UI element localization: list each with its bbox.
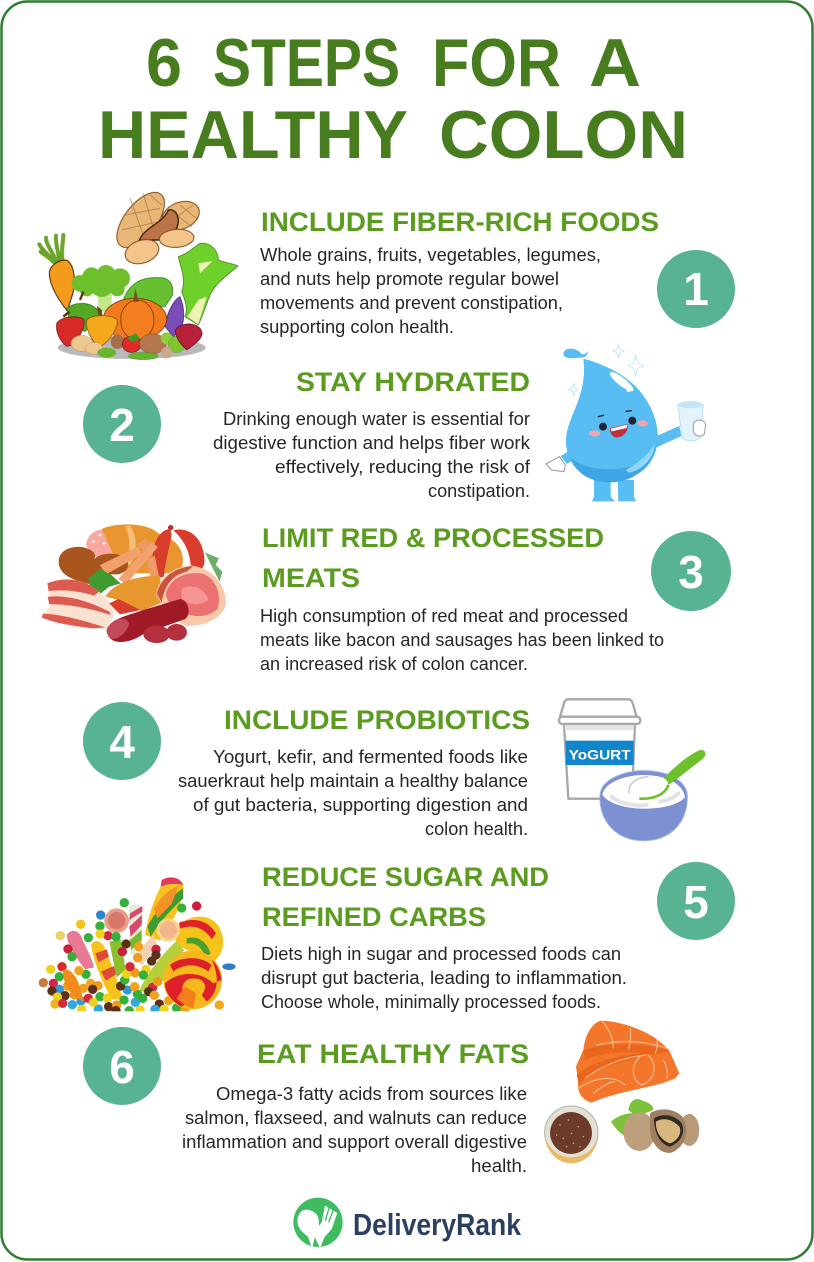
title: COLON — [439, 97, 688, 173]
title: STEPS — [213, 25, 400, 101]
number badge 6 — [83, 1027, 161, 1105]
title — [98, 25, 688, 173]
icon: candy and sweets — [37, 877, 237, 1021]
number badge 5 — [657, 862, 735, 940]
text: step 2: constipation. — [428, 481, 530, 501]
text: step 1 — [260, 245, 601, 337]
title: HEALTHY — [98, 97, 408, 173]
title: A — [589, 25, 641, 101]
text: step 5: disrupt gut bacteria, leading to inflammation. — [261, 968, 627, 988]
title: FOR — [432, 25, 561, 101]
logo: DeliveryRank — [293, 1198, 522, 1249]
text: step 4 — [178, 747, 528, 839]
text: step 2: Drinking enough water is essential for — [223, 409, 530, 429]
text: step 5: Choose whole, minimally processed foods. — [261, 992, 601, 1012]
icon: red and processed meats — [42, 524, 226, 643]
text: step 4: of gut bacteria, supporting digestion and — [193, 795, 528, 815]
text: step 3 — [260, 606, 664, 674]
icon: yogurt cup and bowl: YoGURT — [569, 746, 631, 762]
number badge 3 — [651, 531, 731, 611]
number badge 2 — [83, 385, 161, 463]
heading: step 1: INCLUDE FIBER-RICH FOODS — [261, 207, 659, 237]
heading: step 4: INCLUDE PROBIOTICS — [224, 705, 530, 735]
text: step 6: health. — [471, 1156, 527, 1176]
heading: step 5: REFINED CARBS — [262, 902, 486, 932]
text: step 5: Diets high in sugar and processed foods can — [261, 944, 621, 964]
text: step 1: and nuts help promote regular bowel — [260, 269, 559, 289]
heading: step 6: EAT HEALTHY FATS — [257, 1039, 529, 1069]
icon: salmon, flaxseed and walnuts — [545, 1021, 699, 1163]
logo wordmark: DeliveryRank — [353, 1207, 522, 1242]
heading: step 2: STAY HYDRATED — [296, 367, 530, 397]
text: step 2 — [213, 409, 531, 501]
icon: water drop character — [546, 345, 706, 501]
text: step 2: effectively, reducing the risk of — [275, 457, 531, 477]
text: step 1: Whole grains, fruits, vegetables, legumes, — [260, 245, 601, 265]
text: step 1: movements and prevent constipation, — [260, 293, 563, 313]
text: step 4: sauerkraut help maintain a healthy balance — [178, 771, 528, 791]
text: step 3: High consumption of red meat and processed — [260, 606, 628, 626]
text: step 6 — [182, 1084, 527, 1176]
heading: step 5 — [262, 862, 549, 932]
heading: step 3: LIMIT RED & PROCESSED — [262, 523, 604, 553]
logo mark: spoon and fork — [293, 1198, 343, 1249]
icon: yogurt cup and bowl — [559, 699, 706, 841]
text: step 5 — [261, 944, 627, 1012]
number badge 1 — [657, 250, 735, 328]
heading: step 3: MEATS — [262, 563, 360, 593]
heading: step 3 — [262, 523, 604, 593]
number badge 4 — [83, 702, 161, 780]
number badge 6: 6 — [109, 1041, 135, 1093]
number badge 5: 5 — [683, 876, 709, 928]
text: step 3: an increased risk of colon cancer. — [260, 654, 528, 674]
text: step 6: inflammation and support overall digestive — [182, 1132, 527, 1152]
text: step 2: digestive function and helps fiber work — [213, 433, 531, 453]
number badge 1: 1 — [683, 263, 709, 315]
heading: step 5: REDUCE SUGAR AND — [262, 862, 549, 892]
text: step 1: supporting colon health. — [260, 317, 454, 337]
number badge 3: 3 — [678, 546, 704, 598]
text: step 3: meats like bacon and sausages has been linked to — [260, 630, 664, 650]
title: 6 — [146, 25, 182, 101]
text: step 4: colon health. — [425, 819, 528, 839]
text: step 6: Omega-3 fatty acids from sources like — [216, 1084, 527, 1104]
text: step 4: Yogurt, kefir, and fermented foods like — [213, 747, 528, 767]
number badge 4: 4 — [109, 716, 135, 768]
icon: fiber-rich foods — [39, 184, 238, 360]
text: step 6: salmon, flaxseed, and walnuts can reduce — [185, 1108, 527, 1128]
number badge 2: 2 — [109, 399, 135, 451]
